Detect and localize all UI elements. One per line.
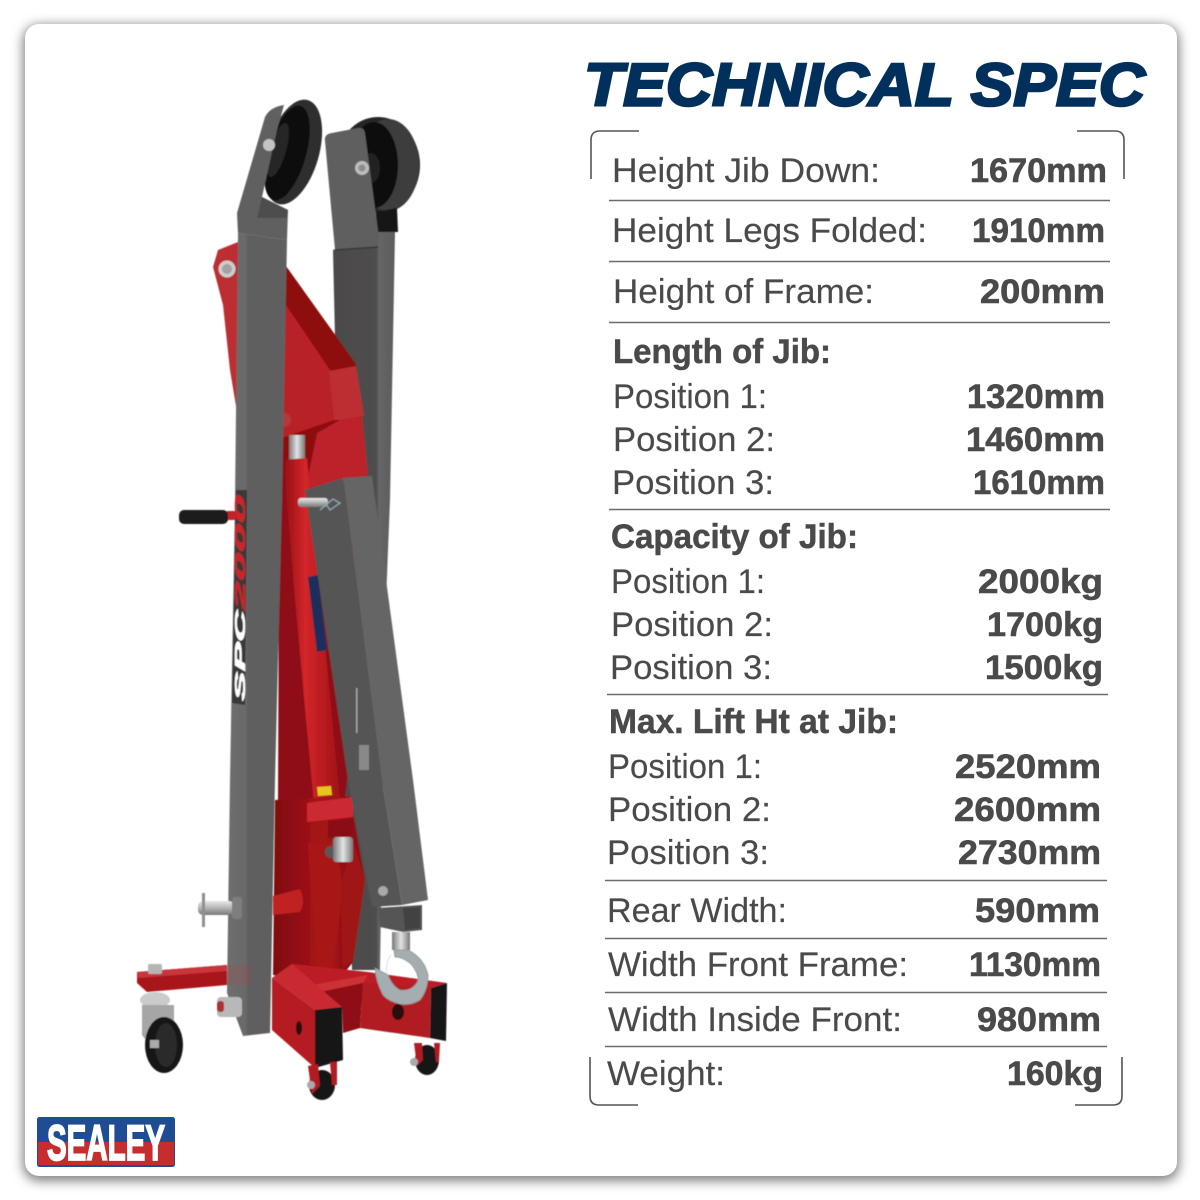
red boom <box>277 266 372 800</box>
corner bracket bottom right <box>1075 1057 1122 1105</box>
row: height legs folded: Height Legs Folded: <box>612 212 927 250</box>
group: max lift height at jib: Position 1: <box>608 748 762 786</box>
row: height of frame: 200mm <box>980 273 1105 311</box>
row: width front frame: Width Front Frame: <box>608 946 908 984</box>
group: capacity of jib: Position 3: <box>610 649 772 687</box>
row: rear width: 590mm <box>975 892 1100 930</box>
group: length of jib: Length of Jib: <box>613 333 831 371</box>
locking pin lower <box>198 893 242 1017</box>
group: max lift height at jib: Max. Lift Ht at Jib: <box>609 703 898 741</box>
row: width inside front <box>608 1001 1101 1039</box>
group: capacity of jib: 1500kg <box>985 649 1103 687</box>
pump handle <box>179 510 236 524</box>
group: length of jib: Position 3: <box>612 464 774 502</box>
group: max lift height at jib: 2730mm <box>958 834 1101 872</box>
group: max lift height at jib <box>607 703 1101 872</box>
corner bracket top left <box>591 131 639 179</box>
row: width front frame: 1130mm <box>969 946 1101 984</box>
group: length of jib: 1320mm <box>967 378 1105 416</box>
group: max lift height at jib: 2600mm <box>954 791 1101 829</box>
row: rear width <box>607 892 1100 930</box>
group: capacity of jib: Position 1: <box>611 563 765 601</box>
hydraulic ram <box>278 435 340 805</box>
group: capacity of jib: 1700kg <box>987 606 1103 644</box>
logo: Sealey: SEALEY <box>47 1115 165 1171</box>
group: max lift height at jib: Position 3: <box>607 834 769 872</box>
lower red column <box>273 796 365 985</box>
red base frame <box>272 964 447 1068</box>
right wheel <box>336 117 420 232</box>
right post <box>325 128 395 970</box>
row: weight: Weight: <box>607 1055 725 1093</box>
row: height jib down: Height Jib Down: <box>612 152 880 190</box>
group: length of jib <box>612 333 1105 502</box>
corner bracket bottom left <box>590 1057 638 1105</box>
lifting hook <box>375 932 428 1004</box>
row: width inside front: Width Inside Front: <box>608 1001 902 1039</box>
group: capacity of jib <box>610 518 1103 687</box>
decal: SPC 2000: 2000 <box>232 493 249 613</box>
group: max lift height at jib: Position 2: <box>608 791 771 829</box>
row: weight: 160kg <box>1007 1055 1103 1093</box>
left post with bracket <box>227 105 288 1036</box>
title: TECHNICAL SPEC <box>584 52 1147 118</box>
grey jib <box>305 476 428 932</box>
red pivot plate <box>213 242 240 430</box>
decal: SPC 2000 <box>232 490 249 705</box>
group: length of jib: 1460mm <box>966 421 1105 459</box>
group: capacity of jib: 2000kg <box>978 563 1103 601</box>
group: length of jib: Position 1: <box>613 378 767 416</box>
row: height legs folded <box>612 212 1105 250</box>
group: length of jib: 1610mm <box>973 464 1105 502</box>
row: height of frame <box>613 273 1105 311</box>
jib scale markings <box>356 688 369 770</box>
group: max lift height at jib: 2520mm <box>955 748 1101 786</box>
pivot bolt <box>218 260 236 278</box>
row: height legs folded: 1910mm <box>972 212 1105 250</box>
front casters <box>307 1043 440 1100</box>
row: width inside front: 980mm <box>977 1001 1101 1039</box>
left wheel <box>253 93 333 211</box>
row: height of frame: Height of Frame: <box>613 273 874 311</box>
locking pin upper <box>298 498 340 510</box>
decal: SPC 2000: SPC <box>232 607 249 701</box>
illustration: folded engine crane <box>137 93 447 1100</box>
logo: Sealey <box>38 1115 174 1171</box>
group: capacity of jib: Capacity of Jib: <box>611 518 858 556</box>
spec table <box>605 152 1110 1093</box>
group: length of jib: Position 2: <box>613 421 775 459</box>
group: capacity of jib: Position 2: <box>611 606 773 644</box>
yellow warning label <box>317 786 332 796</box>
caster arm and left caster <box>137 964 227 1073</box>
row: height jib down: 1670mm <box>970 152 1107 190</box>
corner bracket top right <box>1077 131 1124 179</box>
row: height jib down <box>612 152 1107 190</box>
row: width front frame <box>608 946 1101 984</box>
row: weight <box>607 1055 1103 1093</box>
row: rear width: Rear Width: <box>607 892 787 930</box>
